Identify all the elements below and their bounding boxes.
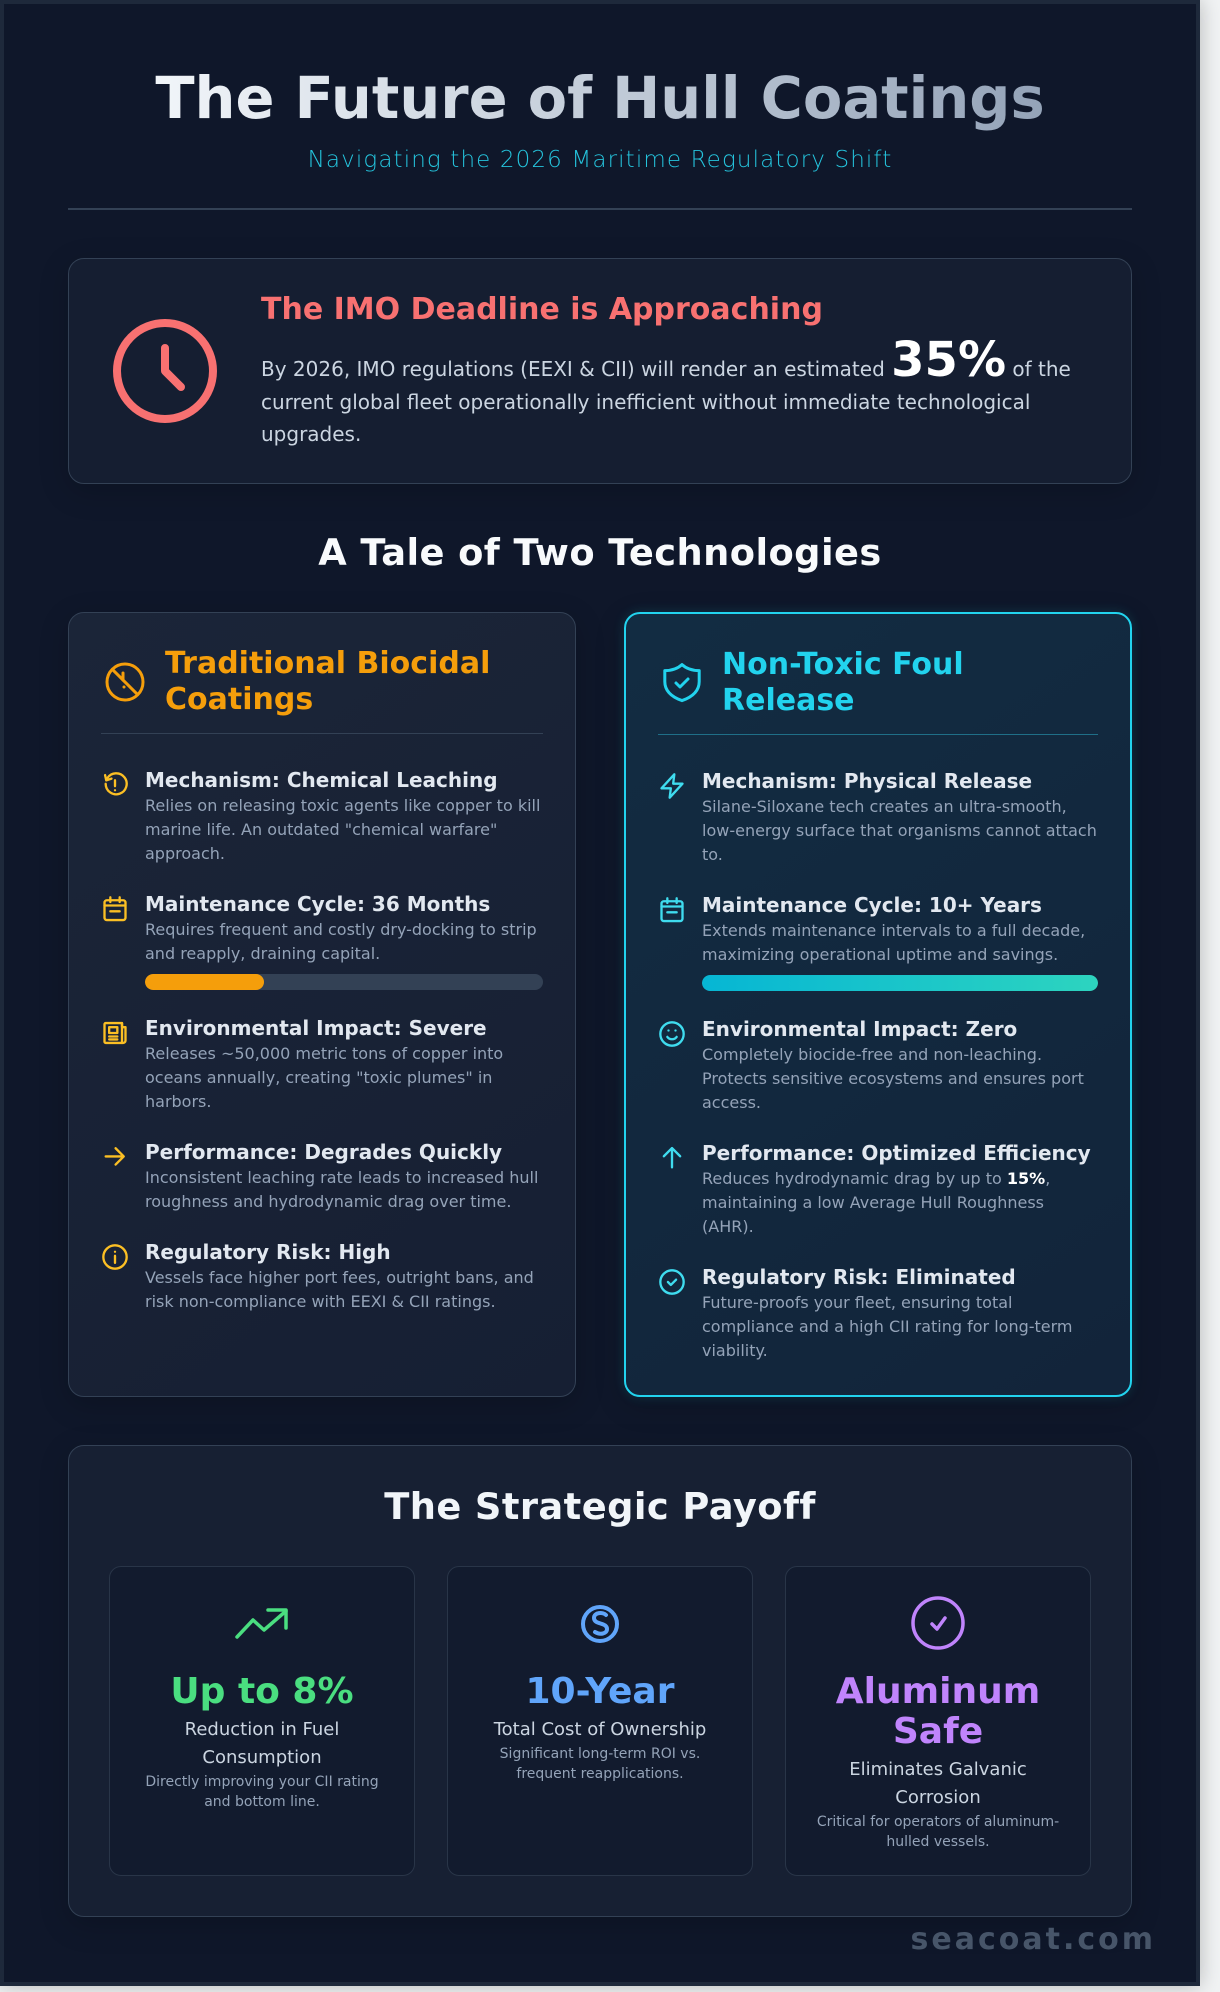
item: mechanism: low-energy surface that organisms cannot attach — [702, 820, 1097, 840]
card: fuel reduction: Reduction in Fuel — [185, 1719, 339, 1740]
card heading: non-toxic — [658, 647, 1098, 735]
heading: A Tale of Two Technologies: A Tale of Two Technologies — [318, 531, 882, 574]
icon: clock — [113, 319, 217, 423]
alert text: By 2026, IMO regulations (EEXI & CII) will render an estimated 35% of the — [261, 332, 1071, 388]
card heading: traditional — [101, 646, 543, 734]
item: environmental: Environmental Impact: Zero — [702, 1016, 1017, 1040]
card: aluminum safe — [785, 1566, 1091, 1876]
card: total cost of ownership — [447, 1566, 753, 1876]
item: environmental: Environmental Impact: Severe — [145, 1016, 487, 1040]
card: fuel reduction: Up to 8% — [170, 1671, 354, 1712]
progress bar: 36 months — [145, 974, 543, 990]
card: total cost of ownership: 10-Year — [526, 1671, 674, 1712]
alert text: upgrades. — [261, 422, 361, 446]
item: regulatory risk: viability. — [702, 1340, 768, 1360]
item: performance: maintaining a low Average Hull Roughness — [702, 1192, 1044, 1212]
item: performance: Inconsistent leaching rate leads to increased hull — [145, 1168, 538, 1186]
card heading: non-toxic: Release — [722, 683, 855, 718]
alert text — [261, 332, 1071, 446]
icon: check circle — [911, 1596, 965, 1650]
item: environmental: Releases ~50,000 metric tons of copper into — [145, 1044, 503, 1062]
item: environmental: Completely biocide-free and non-leaching. — [702, 1044, 1042, 1064]
panel: strategic payoff — [68, 1445, 1132, 1917]
item: maintenance — [660, 892, 1098, 991]
card: aluminum safe: Aluminum — [836, 1671, 1040, 1712]
card: aluminum safe: Eliminates Galvanic — [849, 1759, 1027, 1780]
alert text: current global fleet operationally inefficient without immediate technological — [261, 390, 1030, 414]
watermark: seacoat.com — [911, 1922, 1156, 1957]
card heading: non-toxic: Non-Toxic Foul — [722, 647, 964, 682]
item: regulatory risk — [102, 1240, 534, 1310]
item: regulatory risk: Regulatory Risk: Eliminated — [702, 1264, 1016, 1288]
item: mechanism: marine life. An outdated "chemical warfare" — [145, 820, 497, 838]
heading: The Strategic Payoff: The Strategic Payoff — [384, 1485, 816, 1528]
card: total cost of ownership: Significant long-term ROI vs. — [500, 1746, 700, 1762]
card: fuel reduction — [109, 1566, 415, 1876]
card: total cost of ownership: Total Cost of Ownership — [494, 1719, 706, 1740]
item: maintenance: and reapply, draining capital. — [145, 944, 380, 962]
card: aluminum safe: Corrosion — [895, 1787, 981, 1808]
icon: dollar circle — [581, 1605, 619, 1643]
card: fuel reduction: Consumption — [202, 1747, 322, 1768]
panel: traditional biocidal coatings — [68, 612, 576, 1397]
item: performance: (AHR). — [702, 1216, 754, 1236]
card: aluminum safe: Safe — [893, 1711, 983, 1752]
card: aluminum safe: hulled vessels. — [886, 1834, 990, 1850]
item: environmental — [659, 1016, 1084, 1112]
item: environmental: Protects sensitive ecosystems and ensures port — [702, 1068, 1084, 1088]
item: performance: Performance: Degrades Quickly — [145, 1140, 502, 1164]
item: regulatory risk: compliance and a high CII rating for long-term — [702, 1316, 1073, 1336]
item: mechanism: Mechanism: Chemical Leaching — [145, 768, 498, 792]
item: mechanism: to. — [702, 844, 723, 864]
item: maintenance: maximizing operational uptime and savings. — [702, 944, 1058, 964]
card: fuel reduction: and bottom line. — [204, 1794, 320, 1810]
card: aluminum safe: Critical for operators of aluminum- — [817, 1814, 1059, 1830]
card: fuel reduction: Directly improving your CII rating — [145, 1774, 379, 1790]
item: regulatory risk: risk non-compliance with EEXI & CII ratings. — [145, 1292, 496, 1310]
item: mechanism: Silane-Siloxane tech creates an ultra-smooth, — [702, 796, 1067, 816]
item: environmental — [103, 1016, 503, 1110]
item: performance — [662, 1140, 1091, 1236]
item: regulatory risk: Regulatory Risk: High — [145, 1240, 391, 1264]
item: regulatory risk: Future-proofs your fleet, ensuring total — [702, 1292, 1012, 1312]
item: mechanism — [660, 768, 1097, 864]
item: performance: roughness and hydrodynamic drag over time. — [145, 1192, 511, 1210]
card heading: traditional: Coatings — [165, 682, 313, 717]
subtitle: Navigating the 2026 Maritime Regulatory Shift — [308, 147, 892, 173]
item: maintenance: Extends maintenance intervals to a full decade, — [702, 920, 1085, 940]
icon: trending up — [235, 1608, 288, 1639]
card: total cost of ownership: frequent reapplications. — [516, 1766, 684, 1782]
item: environmental: oceans annually, creating "toxic plumes" in — [145, 1068, 492, 1086]
item: maintenance — [103, 892, 543, 990]
panel: non-toxic foul release — [624, 612, 1132, 1397]
item: performance — [104, 1140, 538, 1210]
item: regulatory risk: Vessels face higher port fees, outright bans, and — [145, 1268, 534, 1286]
card heading: traditional: Traditional Biocidal — [165, 646, 490, 681]
item: maintenance: Maintenance Cycle: 10+ Years — [702, 892, 1042, 916]
item: environmental: access. — [702, 1092, 761, 1112]
item: performance: Reduces hydrodynamic drag by up to 15%, — [702, 1168, 1050, 1188]
item: mechanism: Relies on releasing toxic agents like copper to kill — [145, 796, 540, 814]
item: mechanism: approach. — [145, 844, 225, 862]
item: maintenance: Maintenance Cycle: 36 Months — [145, 892, 490, 916]
item: environmental: harbors. — [145, 1092, 211, 1110]
item: mechanism — [104, 768, 540, 862]
alert heading: The IMO Deadline is Approaching — [261, 292, 823, 327]
panel: IMO deadline alert — [68, 258, 1132, 484]
item: maintenance: Requires frequent and costly dry-docking to strip — [145, 920, 537, 938]
progress bar: 10+ years — [702, 974, 1098, 990]
item: mechanism: Mechanism: Physical Release — [702, 768, 1032, 792]
item: regulatory risk — [659, 1264, 1073, 1360]
item: performance: Performance: Optimized Efficiency — [702, 1140, 1091, 1164]
title: The Future of Hull Coatings — [155, 64, 1045, 132]
